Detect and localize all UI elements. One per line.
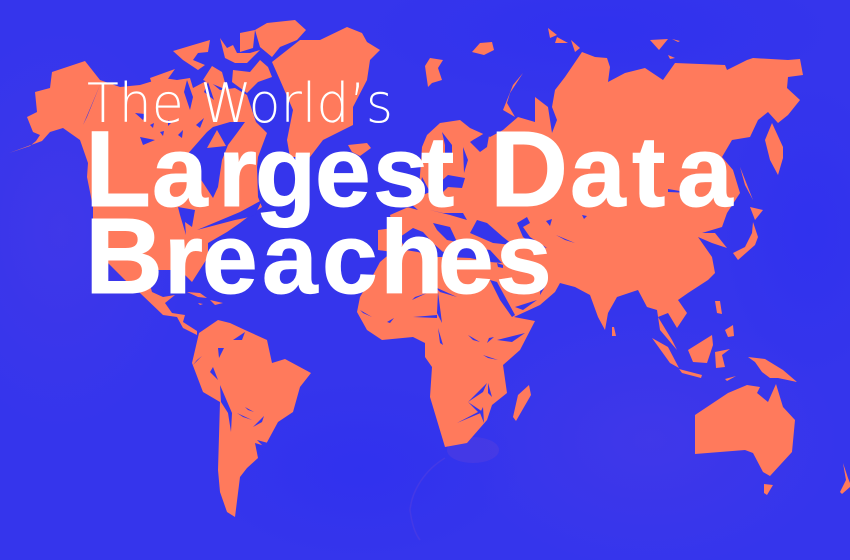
African and Arabian fissures xyxy=(360,287,525,423)
Kamchatka and Japan xyxy=(733,123,783,260)
title line: Breaches: es xyxy=(438,203,552,315)
Australia xyxy=(695,384,795,476)
Tasmania xyxy=(764,484,773,495)
title line: Breaches: h xyxy=(380,200,444,316)
Caribbean islands xyxy=(187,292,223,305)
Greenland xyxy=(272,27,380,157)
title line: Largest Data: argest xyxy=(152,116,482,228)
South America xyxy=(192,320,311,517)
title line: Breaches: B xyxy=(85,195,163,316)
title line: Breaches: reac xyxy=(164,203,378,315)
title line: The World's: The World’s xyxy=(87,72,393,135)
Eurasia and Africa xyxy=(357,52,803,447)
Canadian Arctic islands xyxy=(150,20,306,93)
Iceland xyxy=(348,143,371,156)
Arctic Russian islands xyxy=(425,28,680,117)
title line: Largest Data: D xyxy=(490,108,568,229)
North America xyxy=(9,61,267,335)
New Zealand xyxy=(840,463,850,494)
title xyxy=(85,72,734,316)
title line: Largest Data: ata xyxy=(570,116,734,228)
Southeast Asian islands xyxy=(612,301,797,382)
Madagascar xyxy=(513,385,531,421)
title line: Largest Data: L xyxy=(85,108,151,229)
